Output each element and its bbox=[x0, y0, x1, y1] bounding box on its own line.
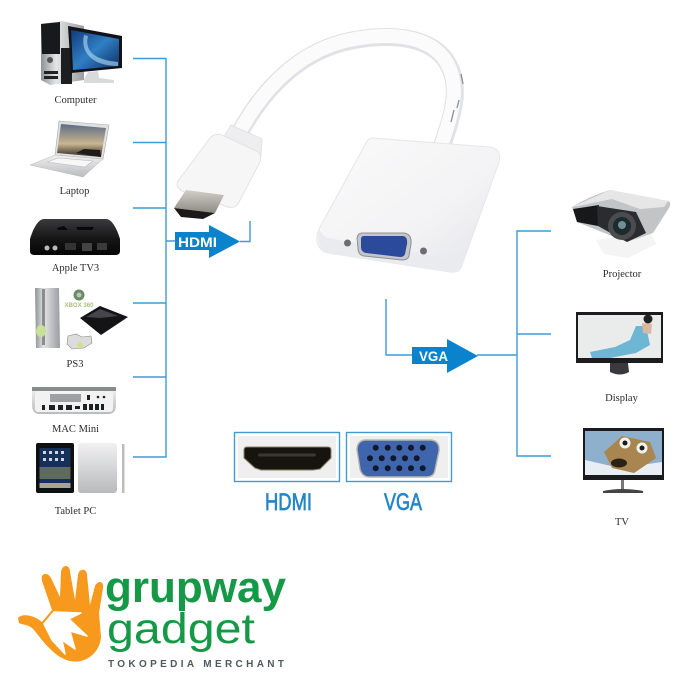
label: Display: Display bbox=[605, 393, 639, 404]
label: Laptop: Laptop bbox=[60, 186, 89, 197]
arrow: HDMI bbox=[175, 225, 240, 258]
panel: HDMI port bbox=[234, 432, 340, 482]
icon: projector bbox=[572, 190, 670, 258]
arrow: VGA: VGA bbox=[419, 348, 448, 364]
wordmark: grupway: grupway bbox=[105, 563, 287, 612]
arrow: HDMI: HDMI bbox=[178, 234, 217, 250]
icon: Mac mini bbox=[32, 387, 116, 414]
cable print bbox=[451, 74, 463, 122]
tagline: TOKOPEDIA MERCHANT bbox=[108, 659, 284, 670]
wordmark: gadget: gadget bbox=[107, 605, 255, 653]
icon: display monitor bbox=[576, 312, 663, 374]
icon: small white hand bbox=[44, 612, 87, 654]
icon: Apple TV bbox=[30, 219, 120, 255]
icon: laptop bbox=[30, 121, 109, 177]
label: Apple TV3: Apple TV3 bbox=[52, 263, 99, 274]
HDMI plug bbox=[174, 125, 262, 219]
connector lines: VGA outputs bbox=[386, 231, 551, 456]
icon: game consoles: XBOX 360 bbox=[64, 302, 94, 309]
label: TV: TV bbox=[615, 517, 629, 528]
adapter cable bbox=[240, 37, 455, 146]
label: Projector: Projector bbox=[603, 269, 642, 280]
connector lines: HDMI sources bbox=[133, 58, 250, 457]
product: HDMI to VGA adapter bbox=[174, 36, 500, 272]
label: VGA: VGA bbox=[384, 489, 422, 516]
logo: grupway gadget bbox=[18, 563, 287, 670]
icon: tablet front, back and side bbox=[36, 443, 124, 493]
icon: computer bbox=[41, 21, 122, 85]
icon: orange hand bbox=[18, 566, 103, 662]
VGA adapter body bbox=[317, 138, 500, 272]
arrow: VGA bbox=[412, 339, 478, 373]
VGA socket bbox=[357, 233, 411, 260]
label: MAC Mini: MAC Mini bbox=[52, 424, 99, 435]
label: Computer: Computer bbox=[54, 95, 97, 106]
label: HDMI: HDMI bbox=[265, 489, 312, 516]
label: Tablet PC: Tablet PC bbox=[55, 506, 96, 517]
icon: TV bbox=[583, 428, 664, 493]
icon: game consoles bbox=[35, 288, 128, 349]
adapter cable highlight bbox=[240, 36, 454, 146]
panel: VGA port bbox=[346, 432, 452, 482]
screw holes bbox=[344, 240, 351, 246]
label: PS3: PS3 bbox=[67, 359, 83, 370]
